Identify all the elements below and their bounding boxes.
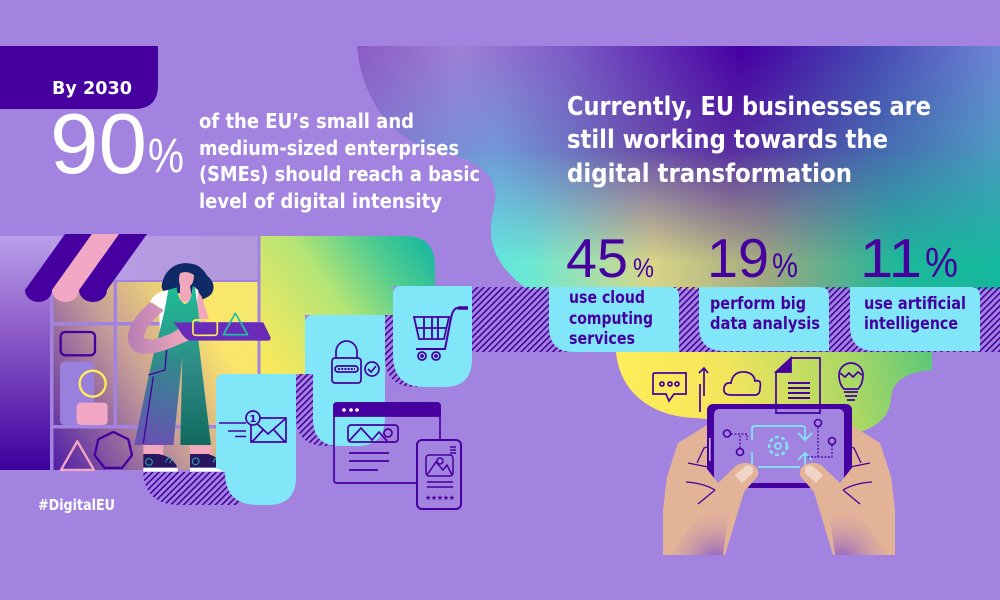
stat card: big data [699, 227, 829, 351]
card: email [216, 374, 296, 505]
stat card: cloud computing: services [569, 329, 635, 349]
stat card: cloud computing: use cloud [569, 288, 645, 308]
card: shopping [393, 286, 472, 387]
illustration: woman holding tray [128, 263, 271, 472]
text block: SME target [199, 109, 480, 213]
icons: shop shapes [60, 332, 132, 470]
stat card: big data: perform big [710, 294, 806, 314]
icon: speech bubble [653, 373, 686, 401]
panel: By 2030 tab [0, 46, 158, 109]
stat: 90 percent: % [148, 130, 184, 183]
stat: 90 percent: 90 [50, 97, 147, 192]
icon: connector nodes [724, 420, 836, 457]
stat card: artificial intelligence: use artificial [864, 294, 966, 314]
stat card: artificial intelligence [850, 227, 980, 351]
tablet [707, 358, 852, 488]
text block: SME target: medium-sized enterprises [199, 136, 459, 160]
stat card: big data: data analysis [710, 314, 820, 334]
stat card: cloud computing: 45 [566, 227, 628, 289]
stat card: cloud computing: computing [569, 309, 653, 329]
icon: light bulb [839, 363, 863, 400]
icon: padlock [332, 341, 379, 383]
icon: cloud [724, 372, 760, 395]
hand: right thumb [800, 443, 895, 555]
heading: current state: still working towards the [567, 125, 888, 155]
icon: envelope: 1 [250, 414, 257, 425]
panel: By 2030 tab: By 2030 [52, 78, 132, 99]
icon: document [776, 358, 820, 413]
finger lines [686, 447, 872, 504]
icon: upward arrow [699, 368, 708, 412]
icon: cart [414, 308, 468, 360]
stat card: big data: 19 [707, 227, 769, 289]
stat card: artificial intelligence: 11 [860, 227, 922, 289]
stat card: big data: % [772, 247, 798, 285]
illustration: phone product page [417, 440, 461, 509]
panel: yellow-green blob [616, 352, 932, 432]
heading: current state [567, 92, 931, 189]
text block: SME target: of the EU’s small and [199, 109, 414, 133]
stat card: cloud computing: % [633, 253, 654, 283]
illustration: web page [334, 403, 440, 483]
icon: process loop [752, 426, 812, 467]
hashtag label: #DigitalEU [38, 496, 115, 514]
panel: gradient blob behind headline [340, 40, 1000, 295]
icon: awning [25, 234, 147, 302]
heading: current state: Currently, EU businesses are [567, 92, 931, 122]
text block: SME target: (SMEs) should reach a basic [199, 162, 480, 186]
hand: left thumb [663, 443, 758, 555]
illustration: hands holding tablet [663, 358, 895, 555]
illustration: phone product page: ★★★★★ [425, 494, 455, 502]
stat card: artificial intelligence: intelligence [864, 314, 958, 334]
stat card: artificial intelligence: % [925, 239, 958, 286]
hatch under cards [143, 315, 440, 505]
card: security [305, 315, 385, 446]
hatch strip under stat cards [472, 287, 1000, 352]
text block: SME target: level of digital intensity [199, 189, 442, 213]
stat card: cloud computing [549, 227, 679, 352]
heading: current state: digital transformation [567, 159, 852, 189]
illustration: shop front [0, 234, 435, 476]
hand: right back [808, 425, 895, 555]
hand: left back [663, 425, 750, 555]
